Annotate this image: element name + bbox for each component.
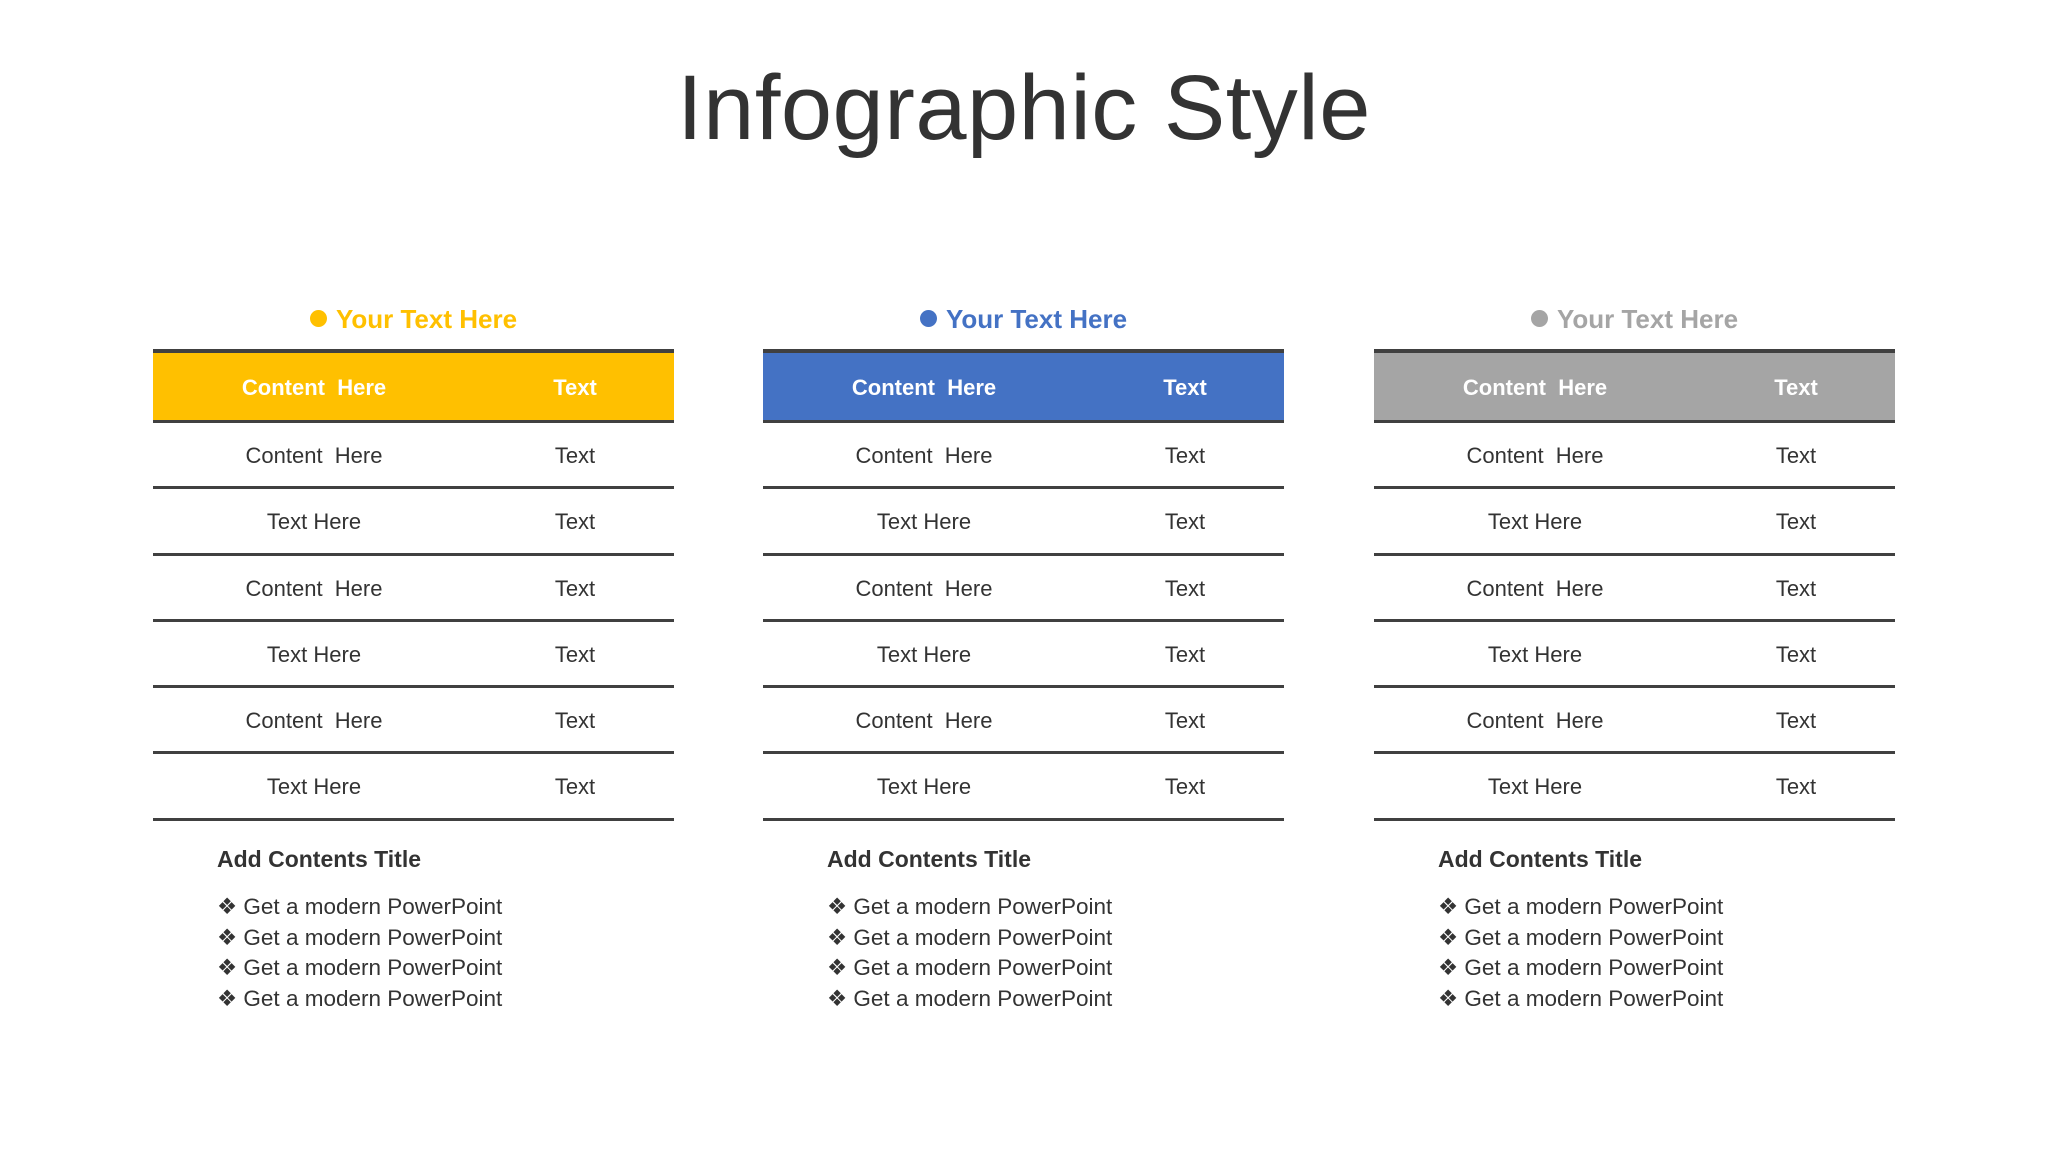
text block: gray contents: ❖ Get a modern PowerPoint: [1438, 925, 1723, 950]
table: blue: Text: [1165, 443, 1205, 468]
text block: gray contents: ❖ Get a modern PowerPoint: [1438, 894, 1723, 919]
table: gray: Text Here: [1488, 642, 1582, 667]
panel heading: yellow: Your Text Here: [336, 304, 517, 334]
text block: gray contents: [1438, 846, 1724, 1011]
table: yellow: Text: [555, 708, 595, 733]
table: gray: Content Here: [1467, 443, 1603, 468]
text block: blue contents: ❖ Get a modern PowerPoint: [827, 986, 1112, 1011]
table: yellow: Text: [555, 443, 595, 468]
title: Infographic Style: [677, 57, 1371, 159]
text block: yellow contents: Add Contents Title: [217, 846, 421, 872]
text block: blue contents: ❖ Get a modern PowerPoint: [827, 925, 1112, 950]
table: gray: Content Here: [1467, 708, 1603, 733]
table: yellow: Text Here: [267, 774, 361, 799]
text block: blue contents: ❖ Get a modern PowerPoint: [827, 955, 1112, 980]
table: blue: Text: [1165, 576, 1205, 601]
table: yellow: Text: [555, 576, 595, 601]
panel heading: blue: Your Text Here: [946, 304, 1127, 334]
table: yellow: Text Here: [267, 642, 361, 667]
table: yellow: Content Here: [246, 443, 382, 468]
table: blue: Text Here: [877, 642, 971, 667]
text block: blue contents: [827, 846, 1112, 1011]
text block: yellow contents: ❖ Get a modern PowerPoint: [217, 925, 502, 950]
table: blue: Content Here: [856, 443, 992, 468]
table: gray: Text: [1776, 708, 1816, 733]
text block: gray contents: Add Contents Title: [1438, 846, 1642, 872]
panel: yellow table: [153, 304, 674, 1011]
table: yellow: Text Here: [267, 509, 361, 534]
table: gray: Content Here: [1467, 576, 1603, 601]
table: yellow: Text: [555, 774, 595, 799]
text block: gray contents: ❖ Get a modern PowerPoint: [1438, 986, 1723, 1011]
table: gray: Text Here: [1488, 774, 1582, 799]
table: yellow: Text: [553, 375, 597, 400]
table: blue: [763, 349, 1284, 821]
table: yellow: Text: [555, 642, 595, 667]
table: gray: Text: [1776, 509, 1816, 534]
table: gray: [1374, 349, 1895, 821]
table: blue: Text: [1165, 708, 1205, 733]
text block: blue contents: ❖ Get a modern PowerPoint: [827, 894, 1112, 919]
table: yellow: Content Here: [246, 576, 382, 601]
panel heading: gray: Your Text Here: [1557, 304, 1738, 334]
table: gray: Text: [1776, 576, 1816, 601]
panel: blue table: [763, 304, 1284, 1011]
text block: yellow contents: ❖ Get a modern PowerPoint: [217, 894, 502, 919]
table: blue: Text Here: [877, 509, 971, 534]
table: blue: Text: [1163, 375, 1207, 400]
table: gray: Content Here: [1463, 375, 1607, 400]
table: gray: Text Here: [1488, 509, 1582, 534]
table: blue: Content Here: [856, 576, 992, 601]
text block: gray contents: ❖ Get a modern PowerPoint: [1438, 955, 1723, 980]
text block: yellow contents: [217, 846, 502, 1011]
table: blue: Content Here: [856, 708, 992, 733]
table: yellow: Content Here: [246, 708, 382, 733]
table: yellow: [153, 349, 674, 821]
text block: yellow contents: ❖ Get a modern PowerPoint: [217, 986, 502, 1011]
text block: yellow contents: ❖ Get a modern PowerPoint: [217, 955, 502, 980]
table: blue: Content Here: [852, 375, 996, 400]
table: blue: Text: [1165, 774, 1205, 799]
text block: blue contents: Add Contents Title: [827, 846, 1031, 872]
table: yellow: Text: [555, 509, 595, 534]
table: gray: Text: [1776, 774, 1816, 799]
table: gray: Text: [1774, 375, 1818, 400]
table: blue: Text Here: [877, 774, 971, 799]
table: blue: Text: [1165, 509, 1205, 534]
table: yellow: Content Here: [242, 375, 386, 400]
table: gray: Text: [1776, 642, 1816, 667]
table: blue: Text: [1165, 642, 1205, 667]
table: gray: Text: [1776, 443, 1816, 468]
panel: gray table: [1374, 304, 1895, 1011]
